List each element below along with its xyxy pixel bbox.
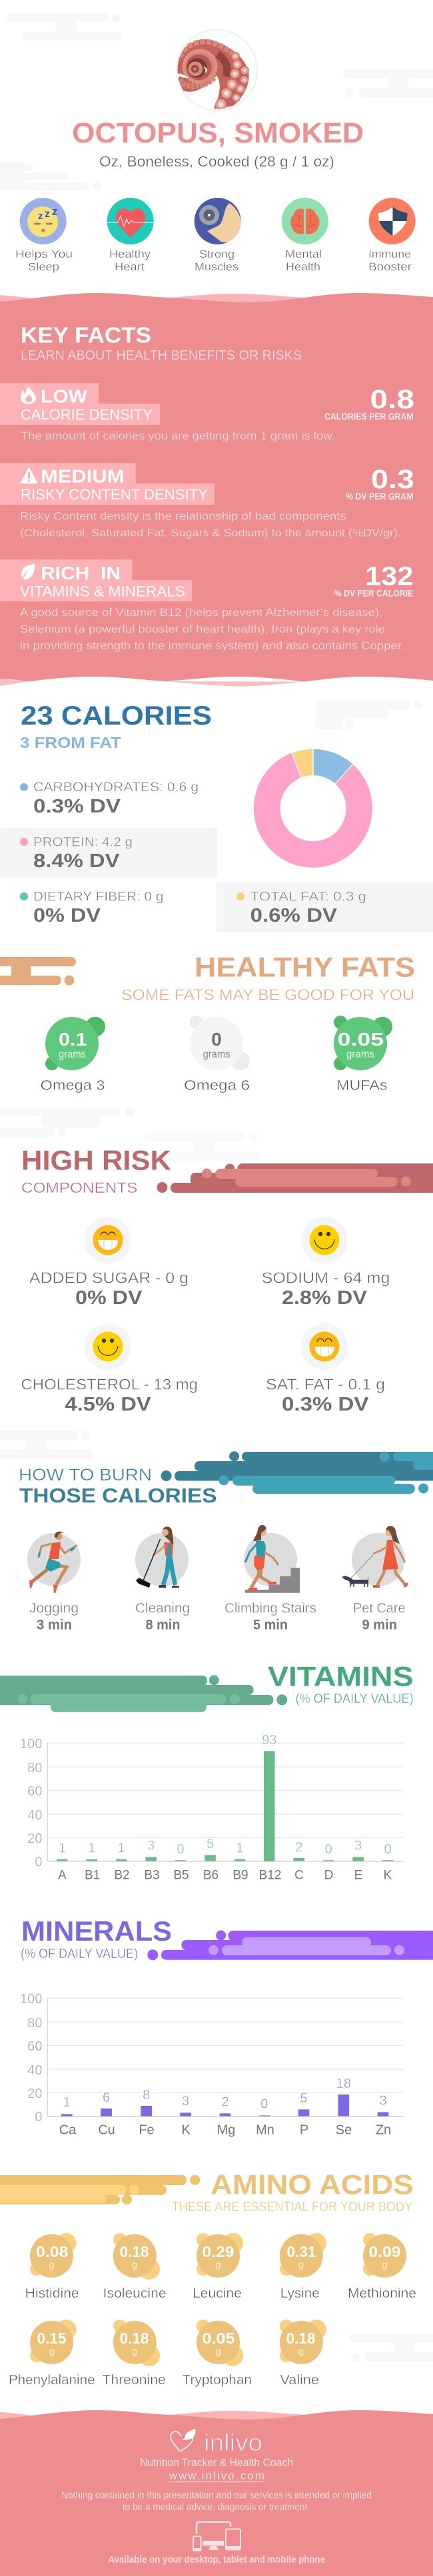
amino acid: leucine: 0.29 xyxy=(203,2243,234,2260)
label: healthy heart: Healthy xyxy=(109,248,151,260)
bar chart: vitamins: B2 xyxy=(114,1869,130,1882)
component: saturated fat: SAT. FAT - 0.1 g xyxy=(266,1376,385,1393)
bar chart: minerals: Mn xyxy=(256,2122,274,2137)
metric name: vitamins and minerals: VITAMINS & MINERALS xyxy=(20,583,185,599)
amino acid: isoleucine xyxy=(103,2233,167,2301)
icon: warning triangle xyxy=(20,467,38,483)
benefits row xyxy=(15,198,416,273)
bar chart: minerals: Mg xyxy=(217,2122,235,2137)
footer xyxy=(0,2410,433,2576)
amino acid: histidine xyxy=(25,2233,79,2301)
amino acid: isoleucine: 0.18 xyxy=(120,2243,149,2260)
bar chart: vitamins xyxy=(20,1733,403,1882)
bar chart: vitamins: 3 xyxy=(354,1838,362,1853)
fat: omega 3: 0.1 xyxy=(59,1029,87,1050)
amino acid: phenylalanine: Phenylalanine xyxy=(9,2373,95,2388)
decorative banner: high risk xyxy=(157,1163,433,1193)
fat: omega 6: 0 xyxy=(211,1029,222,1050)
panel: how to burn those calories xyxy=(19,1451,433,1633)
bar chart: minerals: 60 xyxy=(27,2039,42,2054)
activity: jogging xyxy=(27,1532,81,1633)
amino acid: histidine: g xyxy=(49,2259,55,2271)
icon: helps you sleep xyxy=(20,198,67,244)
activity: cleaning xyxy=(135,1526,190,1633)
decorative banner: healthy fats xyxy=(0,957,76,986)
nutrient: dietary fiber: DIETARY FIBER: 0 g xyxy=(33,890,163,904)
unit: calories per gram: CALORIES PER GRAM xyxy=(324,412,413,422)
bar chart: vitamins: B6 xyxy=(203,1869,218,1882)
icon: leaf xyxy=(21,563,35,580)
bar chart: vitamins: 0 xyxy=(177,1842,185,1857)
label: cleaning: Cleaning xyxy=(135,1601,190,1616)
bar chart: minerals: 100 xyxy=(20,1992,42,2007)
nutrient: dietary fiber xyxy=(20,890,163,926)
label: helps you sleep: Helps You xyxy=(15,248,73,260)
component: cholesterol xyxy=(21,1323,198,1415)
amino acid: isoleucine: g xyxy=(132,2259,137,2271)
background cloud: top right xyxy=(343,69,433,97)
subheading: percent of daily value: (% OF DAILY VALUE) xyxy=(296,1692,414,1706)
heading: 23 calories: 23 CALORIES xyxy=(21,701,212,731)
subheading: percent of daily value: (% OF DAILY VALUE) xyxy=(21,1947,138,1961)
bar chart: minerals: Cu xyxy=(98,2122,115,2137)
icon: flame xyxy=(21,386,36,404)
component: sodium: 2.8% DV xyxy=(282,1287,368,1309)
component: added sugar: ADDED SUGAR - 0 g xyxy=(29,1269,189,1287)
bar chart: vitamins: 2 xyxy=(295,1840,302,1855)
fat: omega 3 xyxy=(40,1017,105,1094)
bar chart: vitamins: C xyxy=(294,1869,304,1882)
disclaimer: Nothing contained in this presentation and our services is intended or implied xyxy=(61,2491,372,2501)
heading: those calories: THOSE CALORIES xyxy=(19,1484,217,1507)
amino acid: threonine: g xyxy=(132,2346,137,2358)
amino acid: valine: Valine xyxy=(280,2373,319,2388)
fact: rich in vitamins and minerals xyxy=(0,559,413,652)
bar chart: vitamins: 1 xyxy=(118,1841,125,1855)
icon: mental health xyxy=(282,198,328,244)
nutrient: dietary fiber: 0% DV xyxy=(33,905,101,926)
amino acid: phenylalanine: g xyxy=(49,2346,55,2358)
bar chart: vitamins: 80 xyxy=(27,1761,42,1775)
bar chart: minerals: P xyxy=(300,2122,308,2137)
subtitle: Oz, Boneless, Cooked (28 g / 1 oz) xyxy=(99,153,334,170)
bar chart: vitamins: 100 xyxy=(20,1737,42,1752)
amino acid: lysine: 0.31 xyxy=(286,2243,316,2260)
heading: key facts: KEY FACTS xyxy=(21,324,151,348)
icon: helps you sleep: z xyxy=(38,210,43,222)
bar chart: vitamins: 5 xyxy=(207,1837,214,1851)
panel: key facts xyxy=(0,293,433,686)
amino acid: tryptophan xyxy=(183,2320,252,2388)
decorative banner: minerals xyxy=(147,1930,433,1960)
bar chart: minerals: 0 xyxy=(260,2096,268,2111)
decorative banner: amino acids xyxy=(0,2175,200,2204)
bar chart: vitamins: D xyxy=(324,1869,333,1882)
label: immune booster: Booster xyxy=(368,260,412,273)
label: mental health: Mental xyxy=(285,248,322,260)
component: cholesterol: CHOLESTEROL - 13 mg xyxy=(21,1376,198,1393)
bar chart: vitamins: 93 xyxy=(262,1733,276,1748)
background cloud: top left xyxy=(7,13,123,41)
panel: amino acids xyxy=(0,2168,416,2388)
amino acid: phenylalanine xyxy=(9,2320,95,2388)
icon: healthy heart xyxy=(107,198,154,244)
bar chart: minerals: 6 xyxy=(103,2091,110,2105)
amino acid: lysine: Lysine xyxy=(280,2286,320,2301)
heading: how to burn: HOW TO BURN xyxy=(19,1466,152,1484)
bar chart: vitamins: K xyxy=(384,1869,392,1882)
bar chart: minerals: Ca xyxy=(59,2122,77,2137)
bar chart: vitamins: 20 xyxy=(27,1831,42,1846)
background cloud: left middle xyxy=(0,1108,135,1137)
decorative banner: burn xyxy=(161,1451,433,1494)
description: risky content density: (Cholesterol, Saturated Fat, Sugars & Sodium) to the amount (%DV/gr). xyxy=(20,526,401,539)
fat: mufas: grams xyxy=(346,1049,374,1060)
background cloud: above burn section xyxy=(0,1431,93,1458)
bar chart: minerals: 40 xyxy=(27,2063,42,2078)
amino acid: lysine xyxy=(280,2233,326,2301)
metric name: calorie density: CALORIE DENSITY xyxy=(21,406,153,423)
bar chart: vitamins: 1 xyxy=(59,1841,66,1855)
description: rich in vitamins and minerals: Selenium (a powerful booster of heart health), Iron (plays a key role xyxy=(20,623,385,635)
rating: rich in: RICH IN xyxy=(41,563,121,583)
unit: percent dv per calorie: % DV PER CALORIE xyxy=(334,589,413,598)
bar chart: vitamins: 0 xyxy=(325,1842,332,1857)
bar chart: minerals: 80 xyxy=(27,2016,42,2031)
bar chart: vitamins: B9 xyxy=(232,1869,248,1882)
subheading: amino acids: THESE ARE ESSENTIAL FOR YOUR BODY xyxy=(172,2200,412,2214)
bar chart: minerals: 5 xyxy=(300,2091,308,2106)
bar chart: vitamins: B1 xyxy=(85,1869,100,1882)
icon: devices xyxy=(193,2522,240,2551)
amino acid: valine: 0.18 xyxy=(286,2330,316,2347)
label: helps you sleep: Sleep xyxy=(28,260,59,273)
panel: minerals xyxy=(20,1915,433,2137)
nutrient: total fat: TOTAL FAT: 0.3 g xyxy=(250,890,366,904)
amino acid: valine xyxy=(280,2320,326,2388)
subheading: components: COMPONENTS xyxy=(21,1179,137,1196)
amino acid: methionine xyxy=(348,2233,416,2301)
fat: omega 3: grams xyxy=(59,1049,86,1060)
label: healthy heart: Heart xyxy=(115,260,145,273)
amino acid: tryptophan: g xyxy=(215,2346,221,2358)
heading: high risk: HIGH RISK xyxy=(21,1144,171,1176)
bar chart: vitamins: B5 xyxy=(173,1869,189,1882)
nutrient: total fat xyxy=(217,882,433,932)
fat: omega 6: grams xyxy=(203,1049,230,1060)
tagline: Nutrition Tracker & Health Coach xyxy=(140,2457,293,2469)
amino acid: threonine: Threonine xyxy=(102,2373,166,2388)
amino acid: lysine: g xyxy=(298,2259,304,2271)
value: 132: 132 xyxy=(365,562,413,591)
description: rich in vitamins and minerals: A good source of Vitamin B12 (helps prevent Alzheimer’s disease), xyxy=(20,606,382,619)
fat: mufas: MUFAs xyxy=(336,1078,388,1094)
value: 0.3: 0.3 xyxy=(371,465,414,494)
amino acid: leucine xyxy=(193,2233,243,2301)
bar chart: vitamins: E xyxy=(354,1869,362,1882)
amino acid: methionine: Methionine xyxy=(348,2286,416,2301)
bar chart: minerals: 18 xyxy=(336,2077,351,2091)
amino acid: threonine: 0.18 xyxy=(120,2330,149,2347)
activity: pet care xyxy=(342,1526,408,1633)
bar chart: vitamins: 3 xyxy=(147,1838,155,1853)
fat: omega 3: Omega 3 xyxy=(40,1078,105,1094)
bar chart: vitamins: B12 xyxy=(259,1869,281,1882)
fat: mufas: 0.05 xyxy=(338,1029,384,1050)
icon: helps you sleep: z xyxy=(45,208,50,220)
bar chart: minerals: K xyxy=(181,2122,191,2137)
bar chart: vitamins: 60 xyxy=(27,1784,42,1799)
heading: vitamins: VITAMINS xyxy=(268,1661,414,1692)
fact: medium risky content density xyxy=(0,463,414,539)
amino acid: methionine: 0.09 xyxy=(369,2243,401,2260)
nutrient: carbohydrates: CARBOHYDRATES: 0.6 g xyxy=(33,781,199,795)
subheading: healthy fats: SOME FATS MAY BE GOOD FOR YOU xyxy=(121,986,414,1003)
bar chart: minerals: 3 xyxy=(182,2094,189,2108)
bar chart: vitamins: 1 xyxy=(88,1841,95,1855)
fact: low calorie density xyxy=(0,383,414,442)
bar chart: minerals: 20 xyxy=(27,2087,42,2101)
activity: climbing stairs xyxy=(224,1525,316,1633)
bar chart: minerals xyxy=(20,1992,403,2137)
component: sodium: SODIUM - 64 mg xyxy=(262,1269,390,1287)
bar chart: minerals: 8 xyxy=(143,2088,150,2102)
description: rich in vitamins and minerals: in providing strength to the immune system) and also contains Copper. xyxy=(20,639,404,652)
icon: strong muscles xyxy=(195,198,242,244)
nutrient: protein: 8.4% DV xyxy=(33,850,120,872)
panel: high risk components xyxy=(21,1144,433,1415)
description: risky content density: Risky Content density is the relationship of bad components xyxy=(20,510,346,522)
heading: minerals: MINERALS xyxy=(21,1915,172,1947)
fat: mufas xyxy=(334,1016,392,1094)
bar chart: vitamins: 1 xyxy=(236,1841,243,1855)
bar chart: minerals: Fe xyxy=(139,2122,155,2137)
metric name: risky content density: RISKY CONTENT DENSITY xyxy=(21,486,208,503)
nutrient: protein xyxy=(0,828,217,877)
amino acid: phenylalanine: 0.15 xyxy=(37,2330,67,2347)
disclaimer: to be a medical advice, diagnosis or treatment. xyxy=(123,2502,310,2513)
description: low calorie density: The amount of calories you are getting from 1 gram is low. xyxy=(21,430,335,442)
component: cholesterol: 4.5% DV xyxy=(65,1394,152,1415)
unit: percent dv per gram: % DV PER GRAM xyxy=(346,491,413,501)
rating: medium: MEDIUM xyxy=(41,466,124,486)
label: climbing stairs: Climbing Stairs xyxy=(224,1601,316,1616)
nutrient: total fat: 0.6% DV xyxy=(250,905,338,926)
icon: immune booster xyxy=(369,198,416,244)
bar chart: minerals: Zn xyxy=(376,2122,391,2137)
amino acid: leucine: g xyxy=(215,2259,221,2271)
bar chart: vitamins: 0 xyxy=(384,1842,392,1857)
bar chart: minerals: Se xyxy=(336,2122,352,2137)
heading: healthy fats: HEALTHY FATS xyxy=(195,951,415,983)
background cloud: left xyxy=(0,163,102,191)
title: OCTOPUS, SMOKED xyxy=(72,117,364,149)
component: saturated fat xyxy=(266,1323,385,1415)
amino acid: tryptophan: 0.05 xyxy=(203,2330,235,2347)
amino acid: valine: g xyxy=(298,2346,304,2358)
subheading: 3 from fat: 3 FROM FAT xyxy=(20,734,121,751)
nutrient: protein: PROTEIN: 4.2 g xyxy=(33,835,133,850)
nutrient: carbohydrates: 0.3% DV xyxy=(33,796,121,817)
label: jogging: Jogging xyxy=(29,1601,79,1616)
amino acid: methionine: g xyxy=(382,2259,388,2271)
label: strong muscles: Muscles xyxy=(195,260,238,273)
component: saturated fat: 0.3% DV xyxy=(282,1394,369,1415)
bar chart: vitamins: B3 xyxy=(144,1869,160,1882)
subheading: key facts: LEARN ABOUT HEALTH BENEFITS OR RISKS xyxy=(21,348,302,363)
fat: omega 6 xyxy=(184,1016,250,1094)
amino acid: threonine xyxy=(102,2320,166,2388)
amino acid: isoleucine: Isoleucine xyxy=(103,2286,167,2301)
heading: amino acids: AMINO ACIDS xyxy=(211,2168,414,2200)
panel: healthy fats xyxy=(0,951,415,1094)
amino acid: histidine: Histidine xyxy=(25,2286,79,2301)
availability note: Available on your desktop, tablet and mobile phone xyxy=(108,2555,325,2565)
label: pet care: Pet Care xyxy=(353,1601,406,1616)
bar chart: minerals: 3 xyxy=(379,2094,387,2108)
donut chart xyxy=(253,749,373,868)
panel: vitamins xyxy=(0,1661,414,1882)
logo: inlivo: inlivo xyxy=(204,2429,262,2456)
value: 0.8: 0.8 xyxy=(370,385,414,414)
logo: inlivo xyxy=(171,2429,262,2456)
website link: www.inlivo.com xyxy=(169,2469,264,2482)
label: strong muscles: Strong xyxy=(199,248,234,260)
panel: calories xyxy=(0,701,433,932)
amino acid: histidine: 0.08 xyxy=(36,2243,69,2260)
background cloud: high risk xyxy=(144,1133,260,1161)
component: added sugar: 0% DV xyxy=(75,1287,143,1309)
rating: low: LOW xyxy=(41,386,88,406)
bar chart: minerals: 2 xyxy=(221,2095,229,2110)
amino acid: leucine: Leucine xyxy=(193,2286,242,2301)
component: sodium xyxy=(262,1217,390,1309)
bar chart: minerals: 1 xyxy=(63,2095,71,2110)
decorative banner: vitamins xyxy=(0,1675,287,1712)
component: added sugar xyxy=(29,1217,189,1309)
bar chart: vitamins: 40 xyxy=(27,1808,42,1823)
nutrient: carbohydrates xyxy=(20,781,199,817)
background cloud: bottom right xyxy=(349,2334,433,2362)
food photo: octopus tentacle xyxy=(177,29,257,111)
label: immune booster: Immune xyxy=(368,248,411,260)
bar chart: vitamins: A xyxy=(58,1869,67,1882)
bar chart: minerals: 0 xyxy=(35,2110,42,2124)
time: 8 min: 8 min xyxy=(145,1617,180,1633)
label: mental health: Health xyxy=(286,260,320,273)
time: 9 min: 9 min xyxy=(362,1617,397,1633)
time: 3 min: 3 min xyxy=(37,1617,72,1633)
amino acid: tryptophan: Tryptophan xyxy=(183,2373,252,2388)
fat: omega 6: Omega 6 xyxy=(184,1078,250,1094)
icon: helps you sleep: z xyxy=(52,205,57,218)
time: 5 min: 5 min xyxy=(253,1617,288,1633)
bar chart: vitamins: 0 xyxy=(35,1855,42,1869)
